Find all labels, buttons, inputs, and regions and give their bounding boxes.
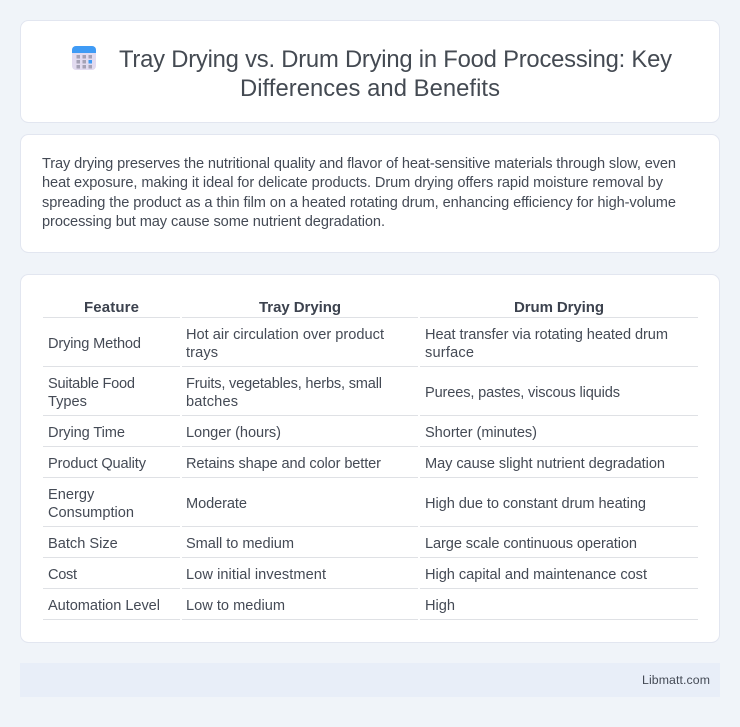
icon: calendar grid [72,46,96,70]
row: cost: Low initial investment [186,567,326,583]
title: Tray Drying vs. Drum Drying in Food Processing: Key [119,46,672,73]
row: batch size: Batch Size [48,536,118,552]
row: drying time: Drying Time [48,425,125,441]
row: drying method: Drying Method [48,336,141,352]
text block: intro paragraph: heat exposure, making it ideal for delicate products. Drum drying offers rapid moisture removal by [42,175,664,191]
row: product quality [48,456,665,472]
row: product quality: May cause slight nutrient degradation [425,456,665,472]
row: product quality: Retains shape and color better [186,456,381,472]
row: suitable food types: Fruits, vegetables, herbs, small [186,376,382,392]
row: cost [48,567,647,583]
row: batch size: Large scale continuous operation [425,536,637,552]
text block: intro paragraph [42,156,676,230]
title [119,46,672,102]
text block: intro paragraph: processing but may cause some nutrient degradation. [42,214,385,230]
panel: title card [20,20,720,122]
row: product quality: Product Quality [48,456,147,472]
row: drying method: Heat transfer via rotating heated drum [425,327,668,343]
table header row: Tray Drying [259,299,341,316]
row: drying time [48,425,537,441]
row: drying method: surface [425,345,474,361]
row: energy consumption: Consumption [48,505,134,521]
row: batch size: Small to medium [186,536,294,552]
row: automation level [48,598,455,614]
row: suitable food types: batches [186,394,238,410]
table header row: Drum Drying [514,299,604,316]
row: energy consumption: High due to constant drum heating [425,496,646,512]
row: cost: Cost [48,567,77,583]
row: automation level: Low to medium [186,598,285,614]
row: suitable food types: Purees, pastes, viscous liquids [425,385,620,401]
row: energy consumption: Moderate [186,496,247,512]
row: cost: High capital and maintenance cost [425,567,647,583]
row: drying method [48,327,668,361]
row: drying time: Longer (hours) [186,425,281,441]
row: suitable food types: Suitable Food [48,376,135,392]
row: drying method: trays [186,345,218,361]
text block: intro paragraph: spreading the product as a thin film on a heated rotating drum, enhancing efficiency for high-volume [42,195,676,211]
text block: intro paragraph: Tray drying preserves the nutritional quality and flavor of heat-sensitive materials through slow, even [42,156,676,172]
row: drying time: Shorter (minutes) [425,425,537,441]
panel: comparison table [20,274,720,642]
row: energy consumption: Energy [48,487,95,503]
footer credit: Libmatt.com [642,673,710,687]
row: energy consumption [48,487,646,521]
footer bar [20,663,720,697]
row: batch size [48,536,637,552]
panel: introduction [20,134,720,252]
row: automation level: High [425,598,455,614]
row: automation level: Automation Level [48,598,160,614]
row: suitable food types [48,376,620,410]
row: drying method: Hot air circulation over product [186,327,384,343]
table header row: Feature [84,299,139,316]
title: Differences and Benefits [240,75,500,102]
table header row [84,299,604,316]
row: suitable food types: Types [48,394,87,410]
